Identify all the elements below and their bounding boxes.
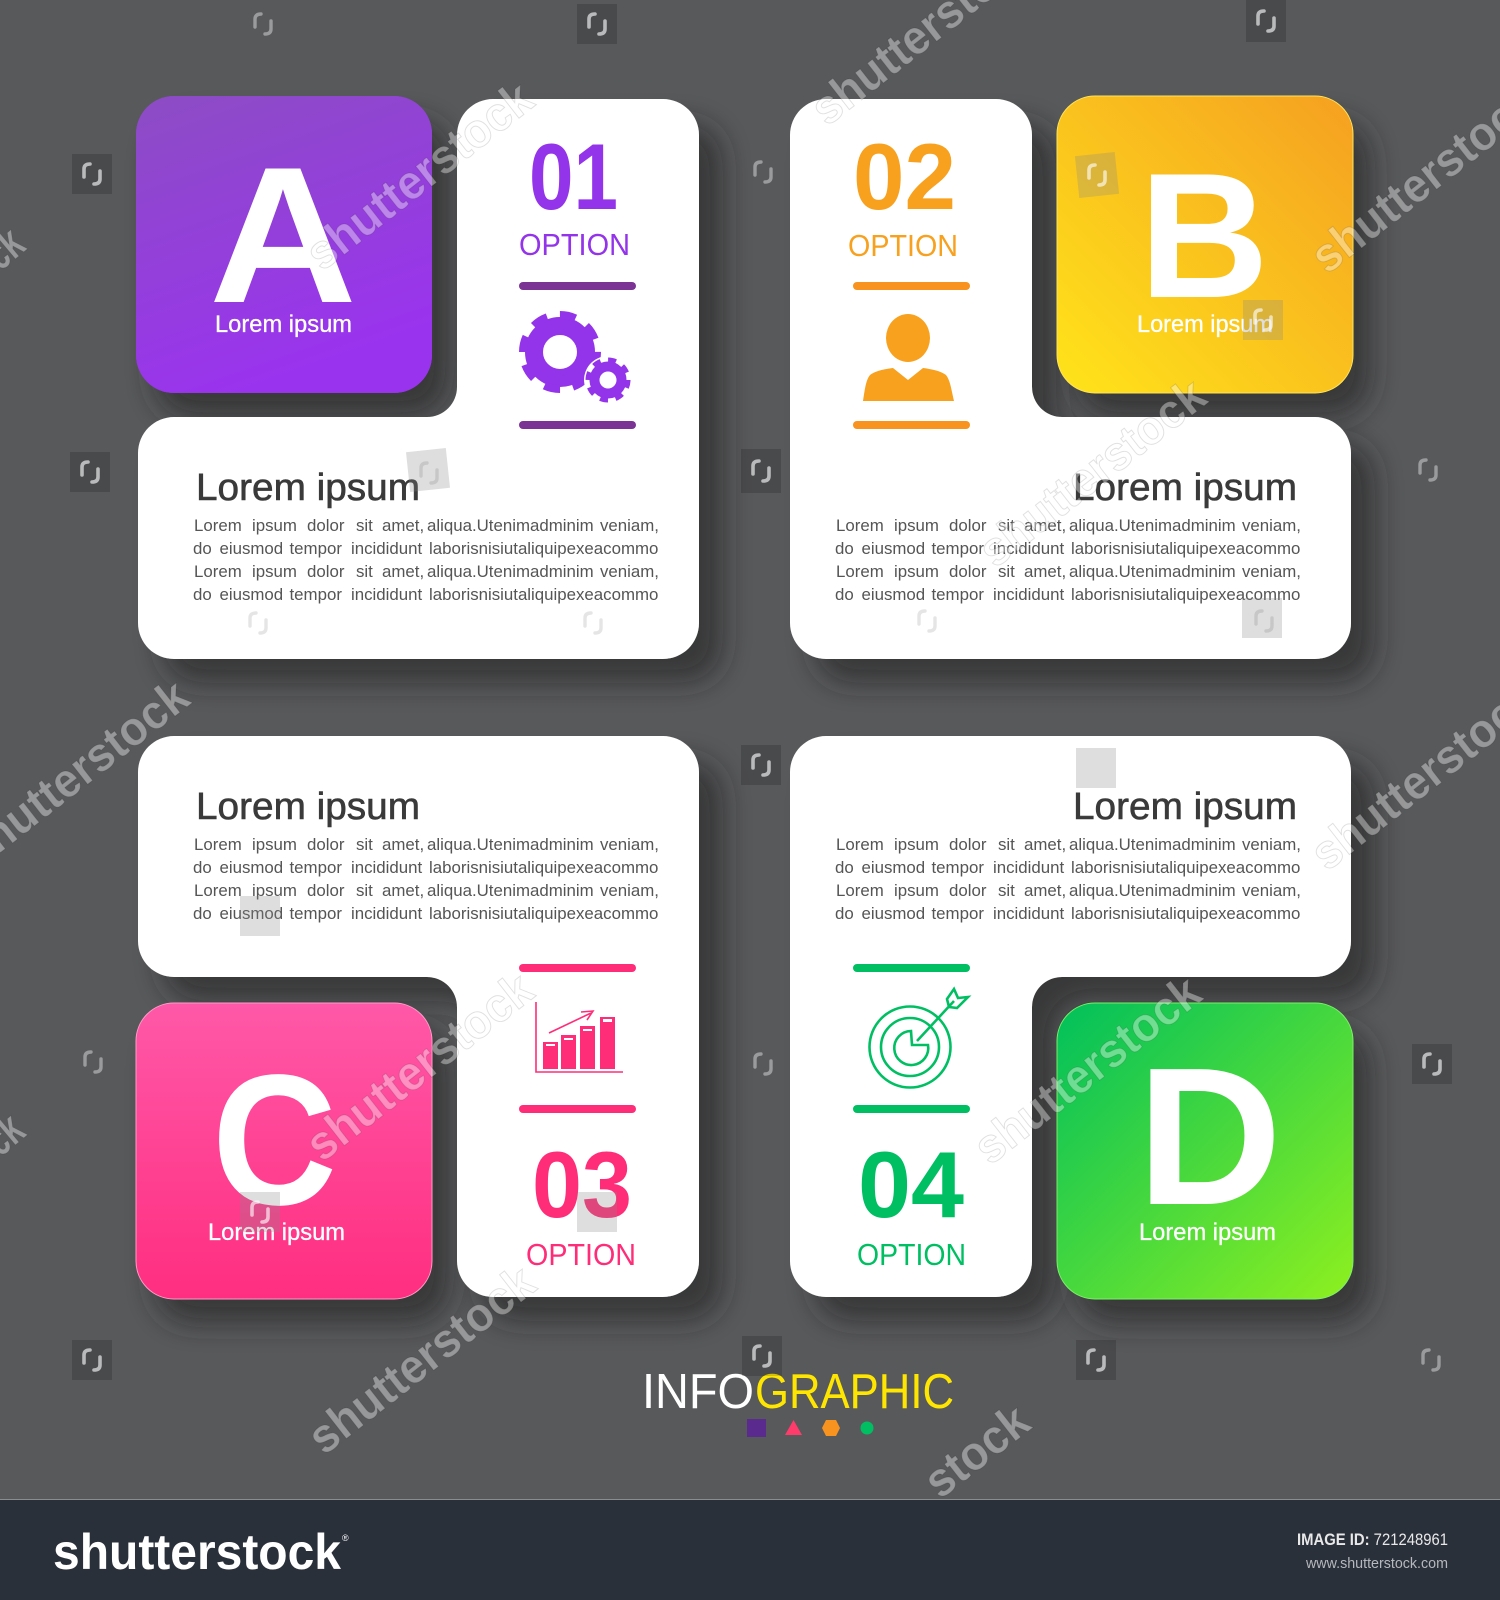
body text: incididunt	[351, 858, 422, 877]
body text: tempor	[932, 585, 984, 604]
divider top	[853, 282, 970, 290]
body text: do	[193, 904, 212, 923]
body text: ipsum	[252, 516, 297, 535]
body text: incididunt	[993, 539, 1064, 558]
body text: sit	[356, 835, 373, 854]
body text: incididunt	[993, 585, 1064, 604]
body text: ipsum	[894, 562, 939, 581]
body text: aliqua.Utenimadminim	[427, 562, 594, 581]
body text: incididunt	[993, 858, 1064, 877]
panel: option 04	[790, 736, 1351, 1297]
divider bottom	[853, 1105, 970, 1113]
body text: aliqua.Utenimadminim	[1069, 562, 1236, 581]
tile: C: C	[212, 1037, 337, 1244]
body text: aliqua.Utenimadminim	[1069, 881, 1236, 900]
watermarks: shutterstock	[296, 962, 543, 1172]
title: infographic	[642, 1365, 954, 1419]
body text: laborisnisiutaliquipexeacommo	[1071, 858, 1300, 877]
tile: C: Lorem ipsum	[208, 1219, 345, 1246]
body text: eiusmod	[862, 904, 925, 923]
body text: tempor	[290, 585, 342, 604]
number 01: 01	[529, 124, 618, 229]
body text: amet,	[1024, 562, 1066, 581]
body text: laborisnisiutaliquipexeacommo	[429, 904, 658, 923]
body text: sit	[356, 881, 373, 900]
tile: B: Lorem ipsum	[1137, 311, 1273, 338]
divider bottom	[853, 421, 970, 429]
body text: sit	[998, 835, 1015, 854]
body text: Lorem	[194, 562, 242, 581]
body text: sit	[998, 562, 1015, 581]
divider top	[519, 282, 636, 290]
body text: do	[835, 858, 854, 877]
body text: dolor	[307, 881, 345, 900]
body text: do	[835, 904, 854, 923]
option label: OPTION	[526, 1237, 636, 1272]
body text: laborisnisiutaliquipexeacommo	[1071, 539, 1300, 558]
body text: do	[835, 585, 854, 604]
body text: Lorem	[836, 881, 884, 900]
body text: incididunt	[351, 539, 422, 558]
body text: laborisnisiutaliquipexeacommo	[1071, 585, 1300, 604]
tile: A: Lorem ipsum	[215, 311, 352, 338]
body text: tempor	[932, 858, 984, 877]
heading: Lorem ipsum	[196, 467, 420, 509]
title: infographic: INFO	[642, 1365, 754, 1419]
body text: sit	[356, 516, 373, 535]
body text: sit	[998, 881, 1015, 900]
body text: veniam,	[600, 562, 659, 581]
number 03: 03	[532, 1132, 632, 1237]
tile: D: Lorem ipsum	[1139, 1219, 1276, 1246]
body text: amet,	[1024, 835, 1066, 854]
body text: dolor	[307, 516, 345, 535]
icon: gears	[523, 315, 632, 404]
icon: person	[863, 314, 954, 401]
body text: ipsum	[894, 835, 939, 854]
heading: Lorem ipsum	[1073, 467, 1297, 509]
body text: dolor	[949, 562, 987, 581]
tile: C	[136, 1003, 432, 1299]
registered mark: ®	[342, 1533, 349, 1543]
footer logo: shutterstock	[53, 1524, 341, 1580]
title: infographic: GRAPHIC	[755, 1365, 954, 1419]
body text: eiusmod	[862, 585, 925, 604]
body text: ipsum	[894, 881, 939, 900]
body text: veniam,	[1242, 835, 1301, 854]
body text: laborisnisiutaliquipexeacommo	[429, 585, 658, 604]
body text: veniam,	[1242, 881, 1301, 900]
heading: Lorem ipsum	[1073, 786, 1297, 828]
number 02: 02	[853, 124, 956, 229]
body text: eiusmod	[862, 539, 925, 558]
body text	[193, 835, 659, 923]
body text: laborisnisiutaliquipexeacommo	[429, 858, 658, 877]
body text: tempor	[290, 858, 342, 877]
legend shapes	[747, 1419, 874, 1437]
body text: sit	[998, 516, 1015, 535]
body text	[835, 516, 1301, 604]
panel: option 03	[138, 736, 699, 1297]
body text: amet,	[382, 881, 424, 900]
body text: Lorem	[836, 516, 884, 535]
body text: do	[193, 539, 212, 558]
divider bottom	[519, 1105, 636, 1113]
body text: ipsum	[252, 835, 297, 854]
body text: do	[193, 858, 212, 877]
tile: D: D	[1137, 1027, 1282, 1246]
body text: dolor	[949, 835, 987, 854]
body text: aliqua.Utenimadminim	[427, 516, 594, 535]
panel: option 02	[790, 99, 1351, 659]
body text: veniam,	[1242, 562, 1301, 581]
icon: bar chart	[536, 1002, 623, 1072]
body text: amet,	[382, 835, 424, 854]
body text: ipsum	[252, 881, 297, 900]
tile: B: B	[1139, 136, 1269, 335]
divider bottom	[519, 421, 636, 429]
body text: amet,	[1024, 516, 1066, 535]
body text: amet,	[382, 562, 424, 581]
watermarks: shutterstock	[969, 368, 1216, 578]
body text: tempor	[932, 539, 984, 558]
footer bar	[0, 1499, 1500, 1600]
body text: aliqua.Utenimadminim	[427, 881, 594, 900]
tile: D	[1057, 1003, 1353, 1299]
body text: dolor	[307, 835, 345, 854]
body text: eiusmod	[220, 585, 283, 604]
body text: eiusmod	[220, 858, 283, 877]
panel: option 01	[138, 99, 699, 659]
body text: do	[193, 585, 212, 604]
body text: aliqua.Utenimadminim	[427, 835, 594, 854]
body text	[193, 516, 659, 604]
body text: Lorem	[836, 562, 884, 581]
icon: target with arrow	[870, 989, 968, 1088]
body text: Lorem	[194, 881, 242, 900]
watermarks: shutterstock	[296, 71, 543, 281]
divider top	[519, 964, 636, 972]
body text: Lorem	[194, 516, 242, 535]
body text: eiusmod	[220, 904, 283, 923]
body text: Lorem	[836, 835, 884, 854]
body text: veniam,	[600, 881, 659, 900]
body text: veniam,	[600, 516, 659, 535]
body text: aliqua.Utenimadminim	[1069, 835, 1236, 854]
body text: laborisnisiutaliquipexeacommo	[429, 539, 658, 558]
body text: amet,	[1024, 881, 1066, 900]
body text: dolor	[949, 516, 987, 535]
body text: Lorem	[194, 835, 242, 854]
watermarks: shutterstock	[964, 965, 1211, 1175]
image id: IMAGE ID: 721248961	[1297, 1530, 1448, 1549]
tile: B	[1057, 96, 1353, 393]
heading: Lorem ipsum	[196, 786, 420, 828]
body text: veniam,	[1242, 516, 1301, 535]
tile: A	[136, 96, 432, 393]
body text: dolor	[949, 881, 987, 900]
body text: incididunt	[351, 585, 422, 604]
body text: laborisnisiutaliquipexeacommo	[1071, 904, 1300, 923]
body text: tempor	[290, 539, 342, 558]
body text	[835, 835, 1301, 923]
body text: dolor	[307, 562, 345, 581]
watermarks: stock	[914, 1394, 1040, 1509]
body text: incididunt	[993, 904, 1064, 923]
website: www.shutterstock.com	[1305, 1555, 1448, 1572]
divider top	[853, 964, 970, 972]
body text: sit	[356, 562, 373, 581]
body text: eiusmod	[862, 858, 925, 877]
body text: ipsum	[252, 562, 297, 581]
watermarks: shutterstock	[298, 1255, 545, 1465]
tile: A: A	[209, 127, 357, 344]
body text: amet,	[382, 516, 424, 535]
body text: aliqua.Utenimadminim	[1069, 516, 1236, 535]
body text: eiusmod	[220, 539, 283, 558]
body text: incididunt	[351, 904, 422, 923]
body text: veniam,	[600, 835, 659, 854]
body text: do	[835, 539, 854, 558]
body text: tempor	[932, 904, 984, 923]
body text: ipsum	[894, 516, 939, 535]
body text: tempor	[290, 904, 342, 923]
number 04: 04	[858, 1132, 964, 1237]
option label: OPTION	[519, 227, 630, 262]
option label: OPTION	[857, 1237, 966, 1272]
option label: OPTION	[848, 228, 958, 263]
